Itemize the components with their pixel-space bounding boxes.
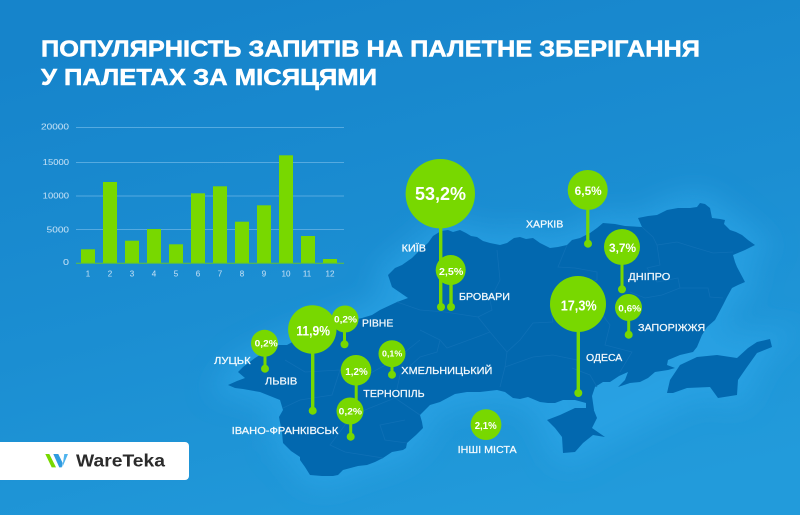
logo: WareTeka xyxy=(0,442,189,480)
pin: Луцьк xyxy=(214,330,278,373)
bars xyxy=(81,155,337,263)
title xyxy=(41,36,700,90)
y axis labels: 10000 xyxy=(43,191,69,201)
map of Ukraine xyxy=(228,203,772,476)
pin: Харків xyxy=(526,170,608,248)
pin: Харків: ХАРКІВ xyxy=(526,219,564,230)
x axis labels: 2 xyxy=(108,270,113,279)
pin: Луцьк: ЛУЦЬК xyxy=(214,356,251,367)
pin: Київ xyxy=(402,159,475,311)
y axis labels: 0 xyxy=(63,257,69,267)
x axis labels: 7 xyxy=(218,270,223,279)
pin: Одеса xyxy=(550,276,623,397)
pin: Івано-Франківськ: ІВАНО-ФРАНКІВСЬК xyxy=(232,426,338,437)
x axis labels: 9 xyxy=(262,270,267,279)
pin: Тернопіль xyxy=(341,355,425,402)
map: region borders xyxy=(283,227,733,458)
map: Crimea xyxy=(547,408,605,453)
pin: Рівне: 0,2% xyxy=(334,315,357,325)
pin: Хмельницький xyxy=(378,340,492,379)
pin: Запоріжжя: ЗАПОРІЖЖЯ xyxy=(638,323,705,334)
pin: Хмельницький: ХМЕЛЬНИЦЬКИЙ xyxy=(401,364,492,377)
pin: Львів: ЛЬВІВ xyxy=(265,377,298,388)
title: ПОПУЛЯРНІСТЬ ЗАПИТІВ НА ПАЛЕТНЕ ЗБЕРІГАННЯ xyxy=(41,36,700,62)
pin: Запоріжжя xyxy=(615,294,705,339)
bar chart xyxy=(41,121,344,279)
pin: Рівне xyxy=(332,306,394,348)
x axis labels: 12 xyxy=(326,270,335,279)
x axis labels: 3 xyxy=(130,270,135,279)
logo: WareTeka: WareTeka xyxy=(76,451,165,471)
x axis labels: 8 xyxy=(240,270,245,279)
x axis labels: 1 xyxy=(86,270,91,279)
x axis labels: 4 xyxy=(152,270,157,279)
pin: Одеса: 17,3% xyxy=(561,297,597,314)
pin: Бровари: БРОВАРИ xyxy=(459,292,510,303)
pin: Одеса: ОДЕСА xyxy=(586,353,623,364)
y axis labels xyxy=(41,121,69,267)
pin: Рівне: РІВНЕ xyxy=(362,319,394,330)
pin: Київ: КИЇВ xyxy=(402,243,426,255)
map glow xyxy=(228,203,772,476)
pin: Інші міста xyxy=(458,409,517,456)
pin: Інші міста: 2,1% xyxy=(475,421,497,432)
pin: Івано-Франківськ xyxy=(232,398,364,441)
y axis labels: 15000 xyxy=(43,157,69,167)
pin: Запоріжжя: 0,6% xyxy=(618,303,641,313)
pin: Дніпро: ДНІПРО xyxy=(628,272,671,283)
map: eastern peninsula xyxy=(667,339,772,398)
x axis labels: 11 xyxy=(303,270,312,279)
x axis labels: 6 xyxy=(196,270,201,279)
pin: Львів xyxy=(265,305,336,415)
pin: Тернопіль: ТЕРНОПІЛЬ xyxy=(363,389,425,400)
icon: logo mark xyxy=(45,454,68,467)
x axis labels xyxy=(86,270,335,279)
pin: Дніпро xyxy=(604,229,671,293)
pin: Дніпро: 3,7% xyxy=(609,243,636,255)
y axis labels: 5000 xyxy=(47,224,69,234)
pin: Тернопіль: 1,2% xyxy=(345,367,368,378)
pin: Івано-Франківськ: 0,2% xyxy=(339,406,362,416)
x axis labels: 5 xyxy=(174,270,179,279)
pin: Бровари xyxy=(436,255,510,311)
y axis labels: 20000 xyxy=(41,121,69,131)
pin: Харків: 6,5% xyxy=(575,186,602,198)
x axis labels: 10 xyxy=(282,270,291,279)
title: У ПАЛЕТАХ ЗА МІСЯЦЯМИ xyxy=(41,64,377,90)
pin: Луцьк: 0,2% xyxy=(255,339,278,349)
map: mainland xyxy=(228,203,755,476)
pin: Хмельницький: 0,1% xyxy=(382,349,403,359)
pin: Київ: 53,2% xyxy=(415,184,466,204)
pin: Львів: 11,9% xyxy=(296,323,330,339)
pin: Бровари: 2,5% xyxy=(439,267,463,278)
pin: Інші міста: ІНШІ МІСТА xyxy=(458,445,517,456)
